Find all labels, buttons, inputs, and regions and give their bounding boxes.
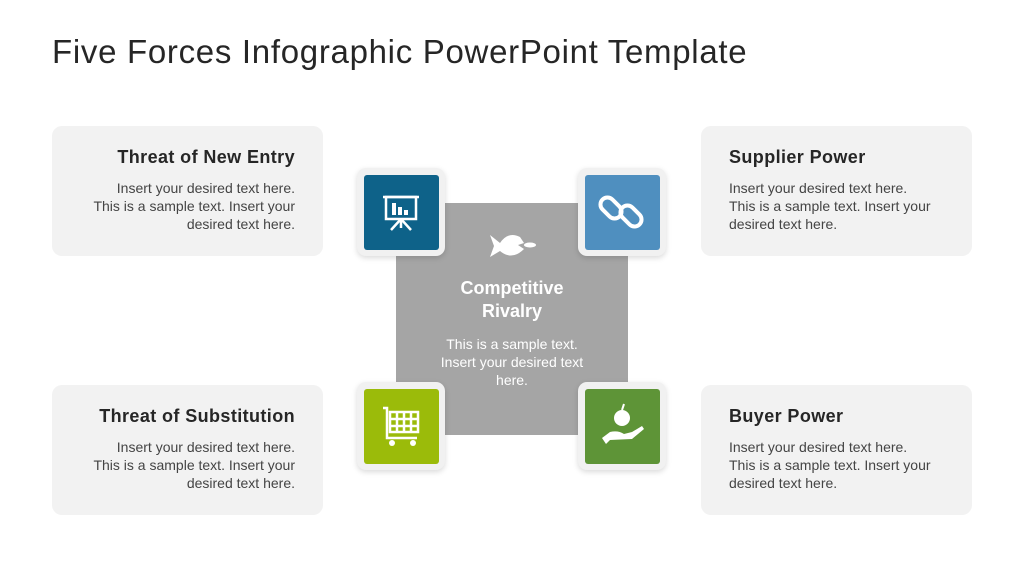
center: competitive rivalry: Competitive xyxy=(460,278,564,298)
panel: buyer power: This is a sample text. Insert your xyxy=(729,457,931,473)
panel: buyer power: Buyer Power xyxy=(729,406,843,426)
icon tile: chain link xyxy=(578,168,666,256)
icon: fish xyxy=(490,235,536,257)
panel: threat of new entry: desired text here. xyxy=(187,216,295,232)
title: Five Forces Infographic PowerPoint Template xyxy=(52,33,747,70)
panel: supplier power: This is a sample text. Insert your xyxy=(729,198,931,214)
icon tile: shopping cart xyxy=(357,382,445,470)
panel: threat of substitution: Insert your desired text here. xyxy=(117,439,295,455)
panel: supplier power: Supplier Power xyxy=(729,147,866,167)
panel: threat of substitution: desired text here. xyxy=(187,475,295,491)
panel: supplier power: desired text here. xyxy=(729,216,837,232)
panel: threat of new entry: Threat of New Entry xyxy=(117,147,295,167)
icon tile: apple in hand xyxy=(578,382,666,470)
center: competitive rivalry: here. xyxy=(496,372,528,388)
panel: threat of substitution xyxy=(52,385,323,515)
panel: supplier power xyxy=(701,126,972,256)
panel: threat of substitution: This is a sample text. Insert your xyxy=(93,457,295,473)
panel: threat of substitution: Threat of Substitution xyxy=(99,406,295,426)
panel: buyer power xyxy=(701,385,972,515)
panel: threat of new entry: This is a sample text. Insert your xyxy=(93,198,295,214)
icon tile: presentation xyxy=(357,168,445,256)
center: competitive rivalry: Rivalry xyxy=(482,301,542,321)
center: competitive rivalry: Insert your desired text xyxy=(441,354,583,370)
panel: buyer power: Insert your desired text here. xyxy=(729,439,907,455)
panel: threat of new entry: Insert your desired text here. xyxy=(117,180,295,196)
center: competitive rivalry xyxy=(396,203,628,435)
panel: buyer power: desired text here. xyxy=(729,475,837,491)
panel: threat of new entry xyxy=(52,126,323,256)
panel: supplier power: Insert your desired text here. xyxy=(729,180,907,196)
center: competitive rivalry: This is a sample text. xyxy=(446,336,578,352)
